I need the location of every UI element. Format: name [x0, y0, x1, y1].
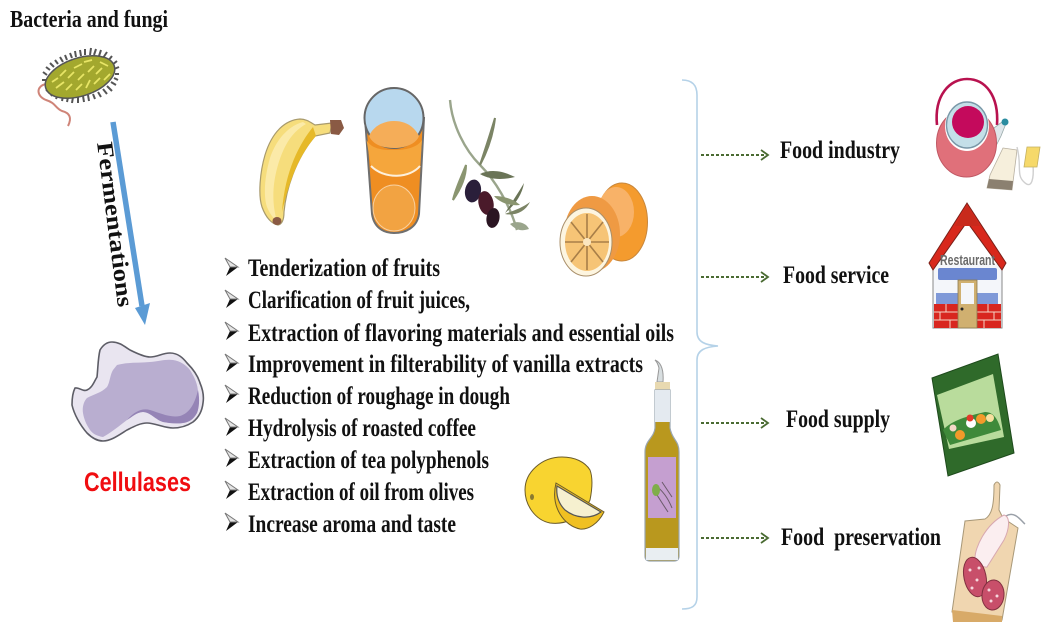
icon: orange	[560, 183, 648, 276]
list item: coffee: Hydrolysis of roasted coffee	[248, 415, 476, 442]
icon: olive branch	[450, 100, 530, 230]
arrow: to food industry	[701, 150, 768, 160]
arrow: fermentation	[113, 122, 150, 325]
icon: bacterium	[38, 48, 120, 126]
arrow: to food preservation	[701, 533, 768, 543]
list item: roughage: Reduction of roughage in dough	[248, 383, 510, 410]
icon: olive oil bottle	[645, 360, 679, 561]
list item: aroma: Increase aroma and taste	[248, 511, 456, 538]
label: food service: Food service	[783, 260, 889, 289]
label: food preservation: Food preservation	[781, 522, 941, 551]
icon: glass of juice	[364, 88, 424, 233]
list item: extraction of flavoring: Extraction of flavoring materials and essential oils	[248, 320, 674, 347]
icon: teapot and tea bag	[936, 79, 1040, 190]
arrow: to food service	[701, 272, 768, 282]
label: food industry: Food industry	[780, 135, 900, 164]
label: cellulases: Cellulases	[84, 467, 191, 497]
icon: cellulase enzyme	[72, 342, 203, 441]
arrow: to food supply	[701, 418, 768, 428]
icon: banana	[260, 119, 344, 225]
label: food supply: Food supply	[786, 404, 890, 433]
heading: bacteria and fungi: Bacteria and fungi	[10, 7, 168, 33]
list item: clarification: Clarification of fruit juices,	[248, 287, 470, 314]
sign text: Restaurant	[940, 252, 995, 269]
list item: oil: Extraction of oil from olives	[248, 479, 474, 506]
icon: lemon	[525, 457, 604, 529]
list item: filterability: Improvement in filterability of vanilla extracts	[248, 351, 643, 378]
icon: frozen food pack	[932, 354, 1014, 476]
icon: salami on cutting board	[952, 482, 1025, 622]
bracket	[682, 80, 718, 609]
list of applications	[225, 255, 674, 538]
icon: restaurant	[929, 203, 1006, 328]
list item: tenderization: Tenderization of fruits	[248, 255, 440, 282]
label: fermentations: Fermentations	[92, 140, 138, 308]
list item: tea: Extraction of tea polyphenols	[248, 447, 489, 474]
